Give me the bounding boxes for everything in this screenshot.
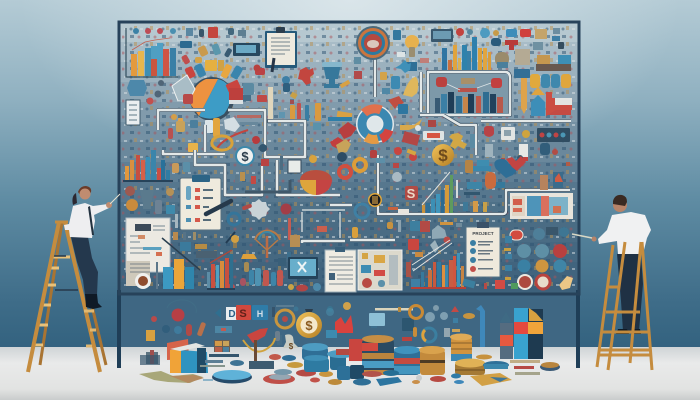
red S icon and small icons: S <box>407 186 416 201</box>
icon: hanging coin cluster <box>272 302 351 328</box>
bottom row: tiles and gear left of centre <box>352 204 462 288</box>
box: orange and blue <box>167 339 208 373</box>
bar chart: blue and orange blocks <box>162 238 200 289</box>
icons: fan of tiles above pie chart <box>184 60 265 80</box>
disc: flat gold stack <box>455 358 485 375</box>
tile grid: right <box>500 308 543 359</box>
bar chart: rising green <box>422 172 453 213</box>
icon: lightbulb <box>405 35 419 57</box>
document: bottom centre <box>325 247 356 292</box>
black ring icon <box>368 193 382 207</box>
white pipes: upper network <box>158 58 571 285</box>
icon: pie chart <box>190 77 234 121</box>
icons under board: centre <box>209 305 485 364</box>
icons: middle right cluster <box>398 104 570 161</box>
circular icons: bottom right <box>462 227 573 290</box>
checklist: PROJECT: PROJECT <box>472 231 494 236</box>
bar chart: top left <box>126 28 178 77</box>
icons: left middle small <box>125 162 196 240</box>
stack: tall orange coins <box>450 334 472 361</box>
ladder: left <box>28 222 106 372</box>
icons: top right cluster <box>354 28 564 109</box>
monitor icon <box>288 257 318 282</box>
person: woman <box>64 186 120 309</box>
person: man <box>572 195 651 334</box>
tiles: D S H: D <box>228 309 236 320</box>
dollar coin: white: $ <box>241 149 249 164</box>
stack: blue and red coins <box>394 346 420 375</box>
clipboard checklist: left <box>180 175 231 230</box>
dollar bag: gold: $ <box>305 318 313 333</box>
tiles: D S H: S <box>239 308 247 320</box>
board frame and stand posts <box>117 22 580 368</box>
red S icon and small icons <box>376 158 487 214</box>
dollar coin: large gold <box>432 144 454 166</box>
bar chart: top center <box>442 37 491 70</box>
stack: blue coins left <box>302 343 355 380</box>
floor <box>0 347 700 400</box>
tiles: D S H: H <box>257 309 263 319</box>
ladder: right <box>597 242 652 370</box>
right person on ladder <box>572 195 652 370</box>
icon: donut chart <box>356 105 394 143</box>
bar chart: left middle <box>123 150 173 182</box>
heart and tag cluster, right <box>485 156 573 219</box>
document: split panel <box>358 250 402 290</box>
dollar coin: large gold: $ <box>438 146 448 165</box>
icons: center cluster <box>176 199 327 292</box>
checklist: PROJECT <box>466 222 500 277</box>
icon: house and report tiles <box>495 49 571 71</box>
stack: orange coins <box>419 346 445 375</box>
icons: top row cluster <box>133 27 260 65</box>
icon: tree diagram <box>255 231 280 258</box>
clipboard document: top <box>265 27 297 72</box>
stack: red and orange coins <box>349 335 394 379</box>
bar chart: rising red bars <box>207 250 235 290</box>
icons under board: left cluster <box>140 300 232 365</box>
icon: concentric target <box>356 26 390 60</box>
dollar and gear cluster, mid <box>235 139 523 195</box>
icons under board: centre: $ <box>289 342 294 351</box>
discs and stacks on floor <box>139 334 560 386</box>
tiles: D S H <box>215 305 268 320</box>
icons: around pie chart <box>126 75 267 152</box>
people panel inside pipe frame <box>430 74 508 114</box>
icon: hammer and column tiles <box>514 69 572 116</box>
document: bottom left <box>126 218 170 289</box>
dollar bag: gold <box>296 309 322 338</box>
bar chart: bottom right <box>411 243 466 289</box>
board surface and wall under board <box>119 22 579 347</box>
left person on ladder <box>28 186 120 372</box>
disc: large blue <box>212 370 252 384</box>
dollar coin: white <box>235 146 255 166</box>
icons: vases, figures, top middle <box>268 62 357 150</box>
